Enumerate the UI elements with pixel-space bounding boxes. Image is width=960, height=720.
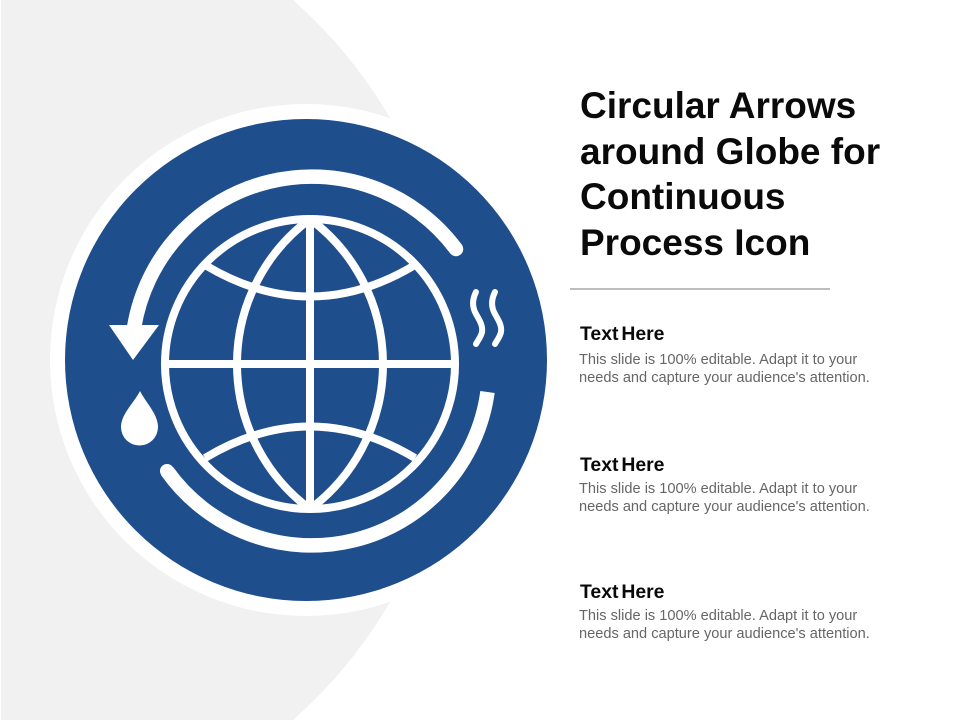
body 1: This slide is 100% editable. Adapt it to your (579, 352, 857, 368)
text block 3 (579, 581, 870, 642)
icon: water drop (121, 391, 158, 446)
text block 2 (579, 454, 870, 515)
background grey circle (1, 0, 456, 720)
body 2: This slide is 100% editable. Adapt it to your (579, 481, 857, 497)
title: Circular Arrows (580, 85, 856, 126)
title: Continuous (580, 176, 786, 217)
body 3: This slide is 100% editable. Adapt it to your (579, 608, 857, 624)
body 3 (579, 608, 870, 642)
white ring (50, 104, 562, 616)
body 2 (579, 481, 870, 515)
heading 2: Text Here (580, 454, 664, 476)
body 1: needs and capture your audience's attention. (579, 370, 870, 386)
body 3: needs and capture your audience's attention. (579, 626, 870, 642)
blue disc (65, 119, 547, 601)
icon: steam (473, 292, 501, 344)
heading 1: Text Here (580, 323, 664, 345)
arrow: bottom circular arc (160, 392, 488, 545)
divider (570, 288, 830, 290)
title: around Globe for (580, 130, 880, 172)
text block 1 (579, 323, 870, 386)
title (580, 85, 880, 262)
body 2: needs and capture your audience's attention. (579, 499, 870, 515)
title: Process Icon (580, 222, 810, 262)
arrow: top circular arrow (109, 177, 456, 360)
icon: globe (165, 219, 455, 509)
body 1 (579, 352, 870, 386)
heading 3: Text Here (580, 581, 664, 603)
